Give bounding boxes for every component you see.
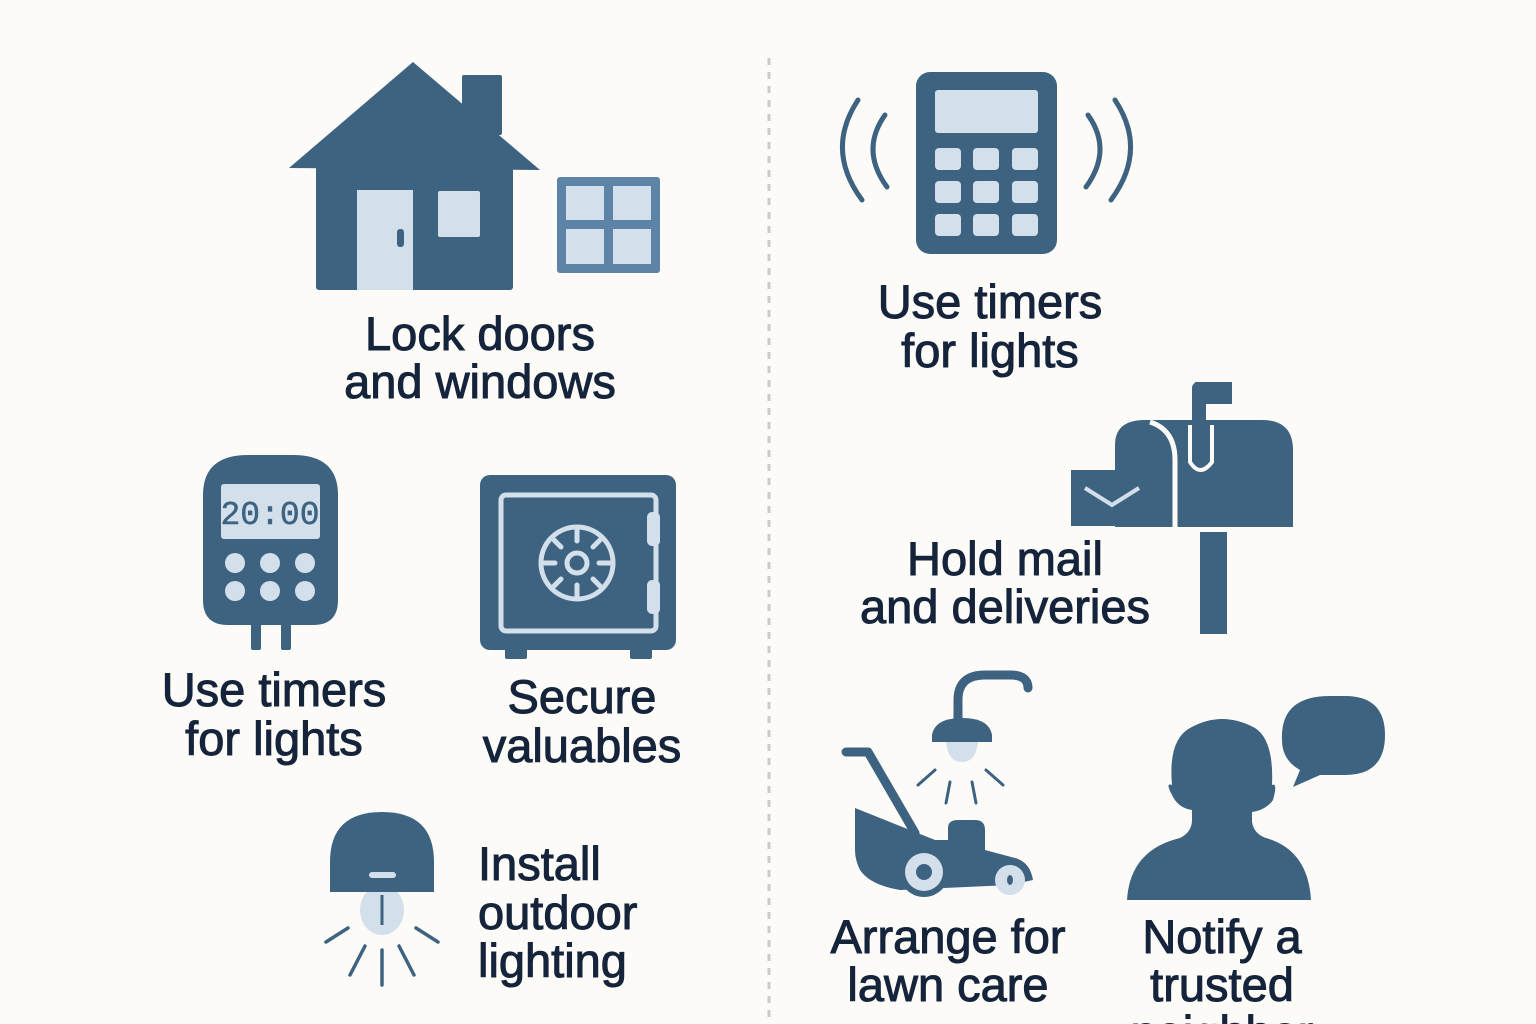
heading: arrange lawn care: Arrange for <box>830 910 1066 963</box>
heading: use timers right <box>878 275 1102 377</box>
heading: hold mail: and deliveries <box>860 580 1150 633</box>
icon: window <box>557 177 660 273</box>
heading: install outdoor lighting <box>478 837 637 987</box>
heading: install outdoor lighting: outdoor <box>478 886 637 939</box>
icon: mailbox <box>1071 382 1293 634</box>
heading: secure valuables <box>483 670 681 772</box>
icon: keypad <box>842 72 1131 254</box>
icon: outdoor light <box>326 812 438 985</box>
heading: arrange lawn care: lawn care <box>847 958 1049 1011</box>
icon: timer: 20:00 <box>220 497 320 534</box>
icon: house <box>289 62 540 290</box>
heading: use timers left <box>162 663 386 765</box>
heading: secure valuables: valuables <box>483 719 681 772</box>
icon: lawn mower with lamp <box>846 675 1033 897</box>
heading: lock doors: and windows <box>344 355 616 408</box>
heading: lock doors: Lock doors <box>365 307 595 360</box>
heading: arrange lawn care <box>830 910 1066 1011</box>
heading: hold mail: Hold mail <box>907 532 1103 585</box>
heading: notify neighbor: trusted <box>1150 958 1294 1011</box>
icon: safe <box>480 475 676 659</box>
heading: use timers left: Use timers <box>162 663 386 716</box>
heading: install outdoor lighting: Install <box>478 837 601 890</box>
heading: use timers right: for lights <box>901 324 1079 377</box>
icon: timer <box>203 455 338 650</box>
heading: use timers right: Use timers <box>878 275 1102 328</box>
heading: install outdoor lighting: lighting <box>478 934 627 987</box>
heading: notify neighbor: Notify a <box>1142 910 1303 963</box>
heading: notify neighbor <box>1131 910 1313 1024</box>
heading: hold mail <box>860 532 1150 633</box>
heading: use timers left: for lights <box>185 712 363 765</box>
heading: lock doors <box>344 307 616 408</box>
icon: person with speech bubble <box>1127 696 1385 900</box>
heading: secure valuables: Secure <box>508 670 656 723</box>
